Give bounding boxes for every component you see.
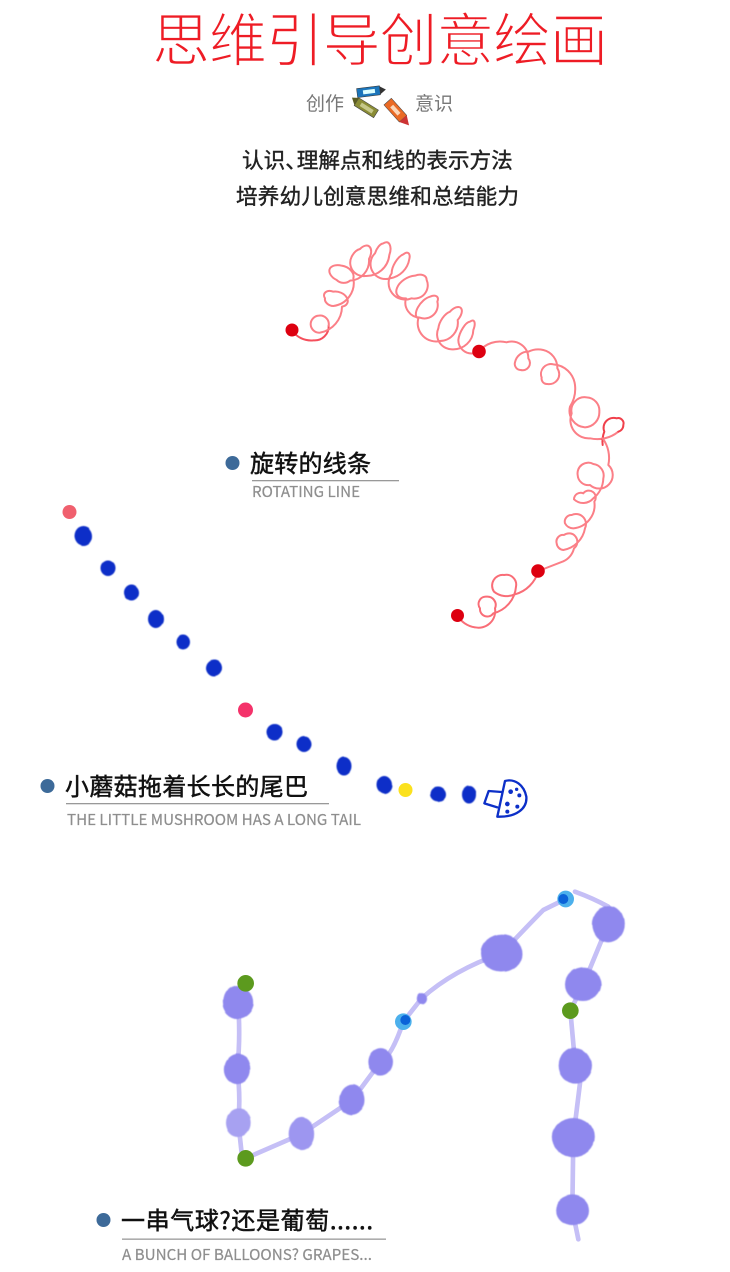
spiral lower section [457,438,613,628]
bullet [226,456,240,470]
subtitle with crayons [306,85,453,129]
green beads [237,975,579,1167]
red dots [286,324,545,622]
string [237,892,608,1239]
balloons [222,906,624,1225]
english caption: THE LITTLE MUSHROOM HAS A LONG TAIL [67,809,361,830]
drawing: balloons or grapes [222,891,624,1239]
heading: balloons [96,1201,386,1265]
pink and yellow dots [62,505,412,797]
drawing: rotating line [286,242,624,628]
heading text: 一串气球?还是葡萄...... [121,1201,373,1236]
heading text: 旋转的线条 [250,444,371,479]
underline [66,803,329,804]
label: 意识: 意识 [415,89,453,116]
heading: mushroom [40,767,361,830]
english caption: ROTATING LINE [252,481,360,502]
underline [122,1238,386,1240]
bullet [96,1213,110,1227]
bullet [40,779,54,793]
heading: rotating line [226,444,399,502]
spiral upper section [292,242,624,445]
label: 创作: 创作 [306,89,344,116]
blue dots [74,526,476,804]
intro line 2: 培养幼儿创意思维和总结能力 [236,180,519,211]
intro line 1: 认识、理解点和线的表示方法 [242,144,513,175]
icon: mushroom [484,780,526,817]
drawing: mushroom tail dots [62,505,526,817]
heading text: 小蘑菇拖着长长的尾巴 [65,767,308,802]
english caption: A BUNCH OF BALLOONS? GRAPES... [122,1244,372,1265]
icon: crayons [349,85,413,129]
blue beads [395,891,574,1030]
underline [252,480,399,481]
